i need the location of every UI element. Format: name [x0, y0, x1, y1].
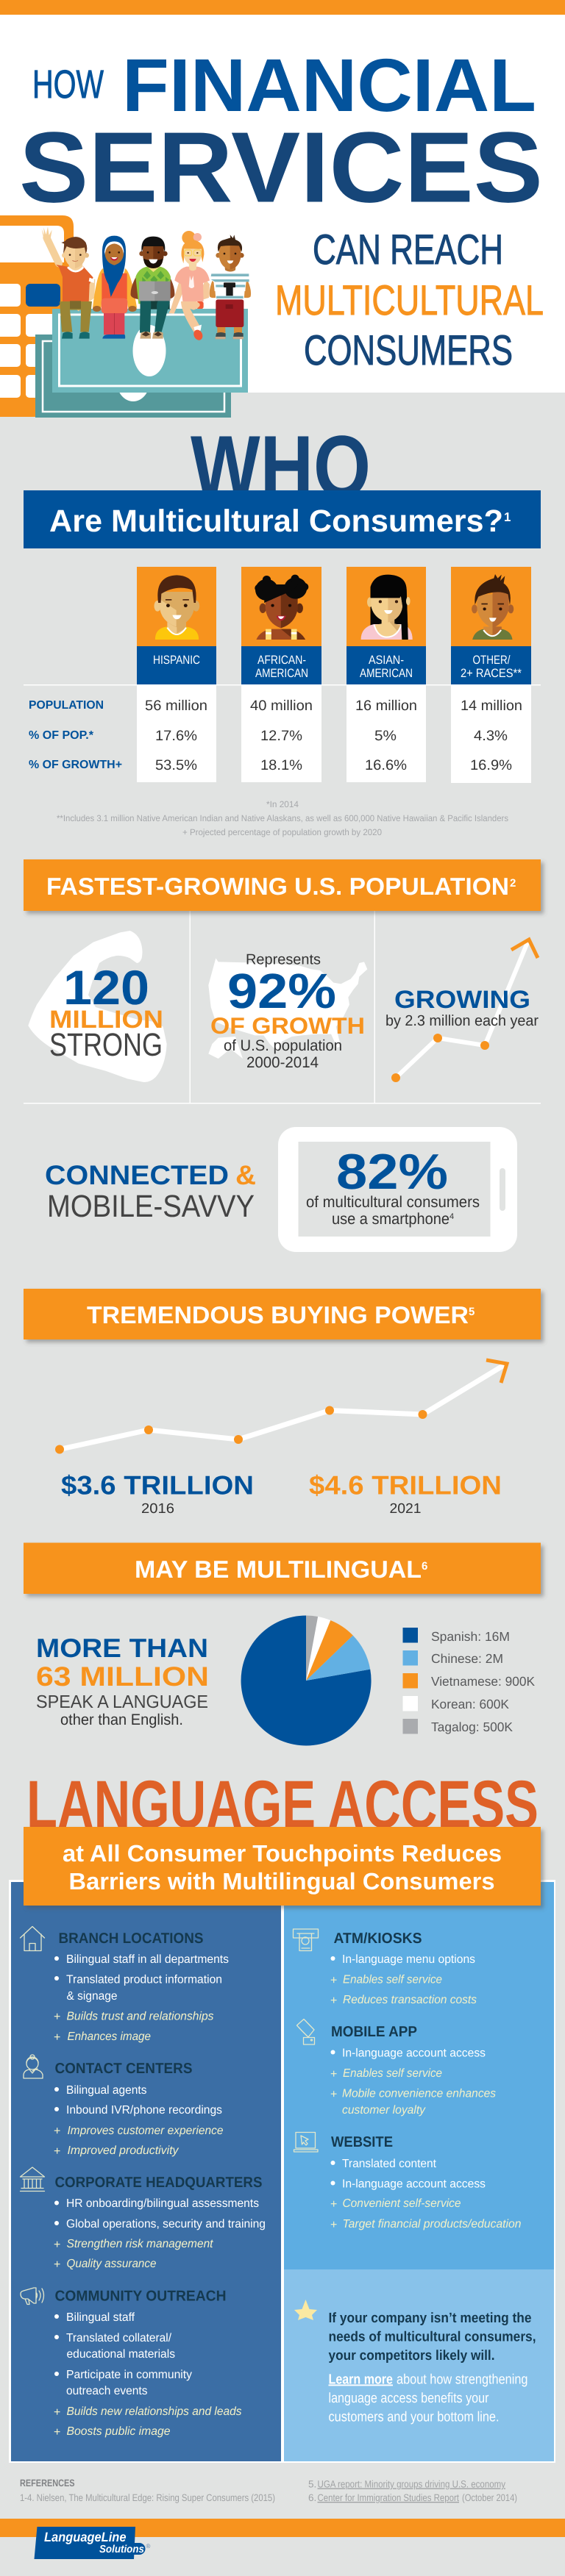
contact centers: +: [54, 2145, 60, 2158]
column: other / 2+ races: 16.9%: [470, 757, 512, 773]
stat: more than 63 million: [36, 1633, 209, 1728]
branch locations: Enhances image: [68, 2031, 151, 2043]
panel: call to action: customers and your bottom line.: [328, 2410, 499, 2425]
website: +: [330, 2219, 337, 2231]
branch locations: Bilingual staff in all departments: [66, 1953, 229, 1966]
legend: Korean: 600K: [431, 1697, 509, 1711]
panel: digital touchpoints: [284, 1882, 554, 2269]
contact centers: Inbound IVR/phone recordings: [66, 2104, 222, 2117]
column: other / 2+ races: 2+ RACES**: [461, 667, 522, 680]
mobile app: Mobile convenience enhances: [342, 2088, 496, 2100]
logo: LanguageLine Solutions: LanguageLine: [44, 2530, 127, 2544]
atm/kiosks: Reduces transaction costs: [343, 1994, 477, 2006]
footnotes: [57, 799, 508, 837]
icon: megaphone: [21, 2288, 44, 2304]
branch locations: [54, 1931, 229, 2044]
community outreach: Bilingual staff: [66, 2311, 135, 2324]
icon: back banknote: [35, 334, 231, 418]
smartphone stat: 82%: 82%: [336, 1144, 448, 1200]
logo: LanguageLine Solutions: Solutions: [99, 2544, 144, 2555]
corporate headquarters: HR onboarding/bilingual assessments: [66, 2197, 259, 2210]
banner: may be multilingual: [24, 1542, 541, 1594]
footnotes: **Includes 3.1 million Native American Indian and Native Alaskans, as well as 600,000 Native Hawaiian & Pacific Islanders: [57, 813, 508, 823]
mobile app: +: [330, 2088, 337, 2101]
column: asian-american: 16.6%: [365, 757, 407, 773]
legend: Tagalog: 500K: [431, 1720, 513, 1734]
icon: US map: [208, 958, 367, 1059]
corporate headquarters: Quality assurance: [66, 2258, 157, 2270]
portrait: asian-american woman: [361, 575, 413, 640]
column: hispanic: HISPANIC: [153, 654, 200, 667]
header: white background: [0, 0, 565, 393]
website: [330, 2134, 522, 2231]
banner: tremendous buying power: [24, 1289, 541, 1339]
stat: 92% of growth: 2000-2014: [246, 1054, 319, 1071]
person 3: man with laptop: [131, 237, 174, 339]
stat: 2021 buying power: $4.6 TRILLION: [309, 1470, 502, 1500]
contact centers: CONTACT CENTERS: [54, 2061, 193, 2077]
portrait: other / mixed-race man: [472, 574, 514, 640]
panel: call to action: needs of multicultural consumers,: [328, 2329, 536, 2345]
stat: 120 million strong: 120: [63, 960, 149, 1015]
branch locations: +: [54, 2011, 60, 2023]
person 5: man in striped shirt with phone: [210, 235, 251, 339]
panel: call to action: [284, 2269, 554, 2461]
smartphone stat: 82%: [278, 1127, 517, 1252]
stat: growing by 2.3 million: [385, 940, 539, 1082]
panel: consumer touchpoints, in person: [11, 1882, 281, 2461]
stat: 2016 buying power: $3.6 TRILLION: [61, 1470, 254, 1500]
title: HOW: [32, 62, 104, 107]
corporate headquarters: CORPORATE HEADQUARTERS: [54, 2175, 262, 2191]
community outreach: Boosts public image: [66, 2425, 171, 2438]
column: hispanic: 53.5%: [155, 757, 197, 773]
stat: 2016 buying power: [61, 1470, 254, 1517]
references: UGA report: Minority groups driving U.S. economy: [318, 2479, 505, 2489]
smartphone stat: 82%: 4: [449, 1212, 454, 1221]
icon: hand holding phone: [297, 2019, 315, 2044]
community outreach: +: [54, 2406, 60, 2419]
stat: growing by 2.3 million: by 2.3 million each year: [385, 1012, 539, 1029]
banner: at all consumer touchpoints: at All Consumer Touchpoints Reduces: [63, 1840, 502, 1867]
website: WEBSITE: [331, 2134, 393, 2150]
column: african-american: [241, 567, 321, 782]
column: african-american: 40 million: [250, 698, 313, 714]
community outreach: COMMUNITY OUTREACH: [54, 2288, 227, 2304]
row labels: [29, 699, 122, 771]
atm/kiosks: [330, 1931, 477, 2007]
stat: 92% of growth: [208, 951, 367, 1071]
references: 5.: [308, 2479, 316, 2489]
panel: call to action: Learn more: [328, 2372, 393, 2388]
banner: may be multilingual: MAY BE MULTILINGUAL: [135, 1556, 422, 1583]
stat: 2021 buying power: 2021: [390, 1501, 421, 1517]
banner: may be multilingual: 6: [422, 1560, 427, 1573]
arrow: growth line: [391, 940, 538, 1082]
table: who are multicultural consumers: [29, 567, 531, 783]
website: In-language account access: [342, 2178, 486, 2191]
community outreach: [54, 2288, 241, 2439]
icon: bank building: [21, 2167, 44, 2191]
references: 1-4. Nielsen, The Multicultural Edge: Rising Super Consumers (2015): [20, 2492, 275, 2503]
contact centers: Bilingual agents: [66, 2084, 147, 2097]
person 4: woman with orange hair: [168, 231, 210, 342]
community outreach: +: [54, 2426, 60, 2439]
column: african-american: AFRICAN-: [257, 654, 306, 667]
references: (October 2014): [462, 2492, 517, 2503]
atm/kiosks: ATM/KIOSKS: [334, 1931, 422, 1947]
atm/kiosks: Enables self service: [343, 1973, 442, 1986]
person 2: woman in blue hijab: [93, 236, 137, 339]
legend: Chinese: 2M: [431, 1651, 503, 1666]
title: SERVICES: [19, 110, 543, 223]
panel: call to action: If your company isn’t meeting the: [328, 2311, 531, 2326]
website: +: [330, 2198, 337, 2211]
legend: [403, 1628, 535, 1734]
mobile app: Enables self service: [343, 2067, 442, 2080]
mobile app: customer loyalty: [342, 2104, 426, 2117]
corporate headquarters: Global operations, security and training: [66, 2218, 266, 2230]
branch locations: Builds trust and relationships: [66, 2010, 213, 2023]
footer orange band: [0, 2519, 565, 2537]
banner: fastest-growing population: [24, 859, 541, 911]
contact centers: Improved productivity: [68, 2144, 179, 2157]
stat: 2016 buying power: 2016: [141, 1501, 174, 1517]
stat: 92% of growth: of U.S. population: [224, 1037, 342, 1054]
corporate headquarters: [54, 2175, 266, 2271]
contact centers: +: [54, 2125, 60, 2138]
arrow: buying power trend line: [55, 1360, 507, 1454]
references: [20, 2477, 517, 2503]
column: hispanic: 17.6%: [155, 728, 197, 744]
heading: WHO: WHO: [191, 418, 371, 516]
panel frame: [9, 1880, 555, 2463]
panel: call to action: your competitors likely will.: [328, 2348, 494, 2364]
logo: LanguageLine Solutions: ®: [146, 2543, 150, 2550]
row labels: % OF GROWTH+: [29, 759, 122, 771]
column: african-american: 12.7%: [260, 728, 302, 744]
column: other / 2+ races: 4.3%: [474, 728, 508, 744]
stat: 120 million strong: STRONG: [49, 1027, 163, 1063]
stat: 120 million strong: MILLION: [49, 1006, 163, 1034]
branch locations: BRANCH LOCATIONS: [59, 1931, 203, 1947]
title: CAN REACH: [313, 226, 503, 273]
stat: growing by 2.3 million: GROWING: [394, 986, 530, 1014]
row labels: POPULATION: [29, 699, 104, 712]
column: hispanic: [137, 567, 216, 782]
column: other / 2+ races: OTHER/: [472, 654, 511, 667]
divider lines: [190, 911, 191, 1103]
corporate headquarters: +: [54, 2258, 60, 2271]
illustration: calculator, money and five diverse consumers: [0, 215, 251, 418]
corporate headquarters: +: [54, 2239, 60, 2251]
mobile app: MOBILE APP: [331, 2024, 417, 2040]
banner: tremendous buying power: TREMENDOUS BUYING POWER: [87, 1301, 469, 1328]
atm/kiosks: In-language menu options: [342, 1953, 475, 1966]
portrait: african-american woman: [255, 575, 308, 640]
contact centers: [54, 2061, 224, 2158]
stat: 92% of growth: 92%: [227, 964, 336, 1019]
stat: 2021 buying power: [309, 1470, 502, 1517]
person 1: waving man: [42, 226, 95, 339]
atm/kiosks: +: [330, 1994, 337, 2007]
corporate headquarters: Strengthen risk management: [66, 2238, 213, 2250]
heading: connected and mobile-savvy: [45, 1160, 256, 1224]
column: asian-american: 5%: [374, 728, 397, 744]
mobile app: [330, 2024, 496, 2117]
atm/kiosks: +: [330, 1975, 337, 1986]
banner: are multicultural consumers: Are Multicultural Consumers?: [49, 504, 503, 539]
stat: 92% of growth: OF GROWTH: [210, 1012, 365, 1039]
stat: 92% of growth: Represents: [246, 951, 321, 967]
community outreach: Builds new relationships and leads: [66, 2405, 241, 2418]
stat: more than 63 million: 63 MILLION: [36, 1661, 209, 1692]
column: asian-american: [347, 567, 426, 782]
top orange band: [0, 0, 565, 15]
community outreach: Participate in community: [66, 2369, 192, 2381]
banner: tremendous buying power: 5: [469, 1306, 475, 1318]
legend: Spanish: 16M: [431, 1629, 510, 1644]
branch locations: & signage: [66, 1990, 118, 2003]
column: asian-american: AMERICAN: [360, 667, 413, 680]
banner: are multicultural consumers: [24, 490, 541, 548]
banner: fastest-growing population: 2: [510, 877, 516, 890]
stat: more than 63 million: SPEAK A LANGUAGE: [36, 1692, 208, 1712]
banner: fastest-growing population: FASTEST-GROWING U.S. POPULATION: [46, 873, 509, 900]
contact centers: Improves customer experience: [68, 2125, 224, 2137]
community outreach: outreach events: [66, 2385, 147, 2397]
icon: call agent: [24, 2055, 43, 2078]
mobile app: In-language account access: [342, 2047, 486, 2060]
icon: front banknote: [52, 309, 248, 393]
column: other / 2+ races: 14 million: [461, 698, 522, 714]
footnotes: *In 2014: [266, 799, 299, 809]
legend: Vietnamese: 900K: [431, 1674, 535, 1689]
website: Translated content: [342, 2158, 437, 2170]
icon: laptop cursor: [294, 2132, 318, 2152]
branch locations: +: [54, 2031, 60, 2044]
icon: orange calculator: [0, 215, 74, 417]
title: [19, 43, 544, 374]
panel: call to action: about how strengthening: [397, 2372, 528, 2388]
references: 6.: [308, 2492, 316, 2503]
smartphone stat: 82%: use a smartphone: [332, 1210, 449, 1228]
community outreach: educational materials: [66, 2348, 175, 2361]
table rule: [24, 684, 541, 685]
column: asian-american: ASIAN-: [369, 654, 404, 667]
stat: 120 million strong: [28, 931, 167, 1082]
pie chart: languages spoken: [241, 1616, 372, 1745]
community outreach: Translated collateral/: [66, 2332, 172, 2344]
footnotes: + Projected percentage of population growth by 2020: [182, 827, 382, 837]
row labels: % OF POP.*: [29, 729, 94, 742]
column: african-american: 18.1%: [260, 757, 302, 773]
mobile app: +: [330, 2068, 337, 2081]
title: FINANCIAL: [122, 43, 536, 127]
references: Center for Immigration Studies Report: [318, 2492, 459, 2503]
branch locations: Translated product information: [66, 1973, 222, 1986]
column: african-american: AMERICAN: [255, 667, 308, 680]
logo: LanguageLine Solutions: [34, 2527, 150, 2559]
column: hispanic: 56 million: [145, 698, 207, 714]
website: Target financial products/education: [343, 2218, 522, 2230]
stat: more than 63 million: other than English.: [60, 1711, 183, 1728]
column: other / 2+ races: [451, 567, 531, 783]
heading: connected and mobile-savvy: MOBILE-SAVVY: [47, 1189, 255, 1224]
banner: at all consumer touchpoints: [24, 1827, 541, 1906]
portrait: hispanic man: [154, 575, 199, 640]
banner: at all consumer touchpoints: Barriers with Multilingual Consumers: [69, 1868, 494, 1895]
heading: connected and mobile-savvy: &: [235, 1160, 256, 1190]
stat: more than 63 million: MORE THAN: [36, 1633, 208, 1663]
icon: star: [294, 2300, 317, 2320]
references: REFERENCES: [20, 2477, 75, 2489]
banner: are multicultural consumers: 1: [504, 510, 511, 524]
icon: ATM: [293, 1929, 318, 1951]
website: Convenient self-service: [343, 2197, 461, 2210]
smartphone stat: 82%: of multicultural consumers: [306, 1193, 480, 1211]
icon: house: [21, 1926, 44, 1951]
panel: call to action: language access benefits your: [328, 2391, 489, 2406]
icon: flexed arm: [28, 931, 167, 1082]
heading: connected and mobile-savvy: CONNECTED: [45, 1160, 229, 1190]
column: asian-american: 16 million: [355, 698, 417, 714]
